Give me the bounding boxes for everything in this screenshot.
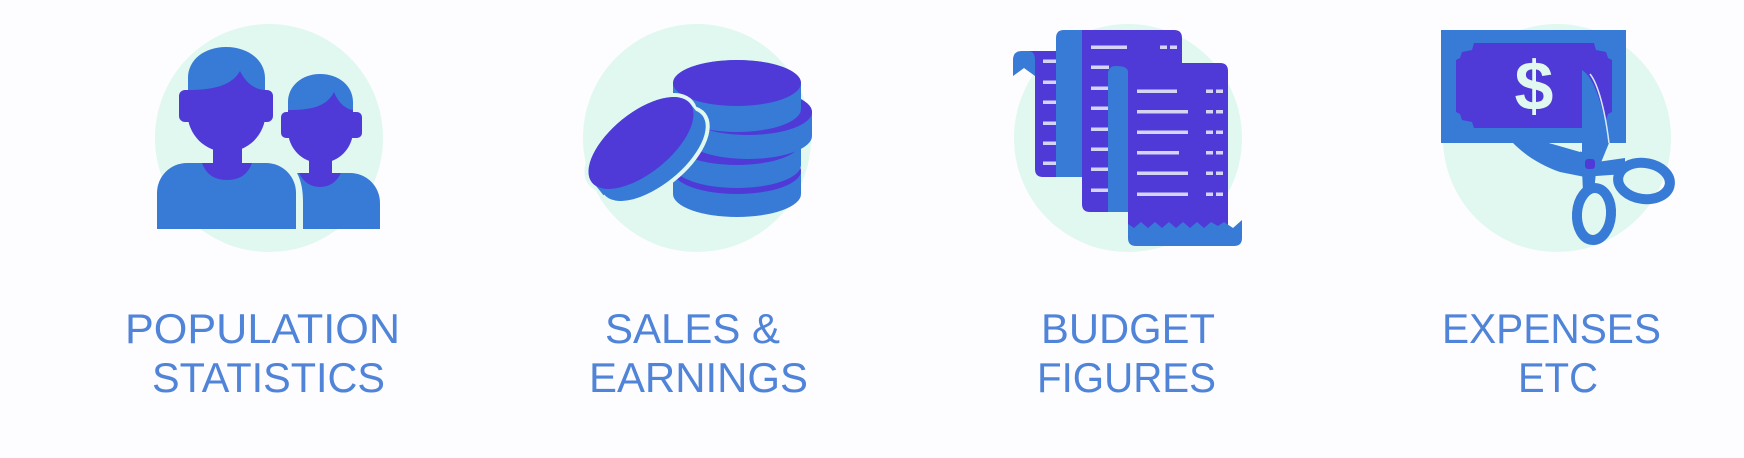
- label: budget figures: BUDGET: [1041, 305, 1215, 352]
- panel: budget figures: [1013, 24, 1242, 401]
- icon: scissors cutting banknote: [1441, 24, 1672, 252]
- label: budget figures: [1037, 305, 1216, 401]
- label: sales and earnings: [589, 305, 808, 401]
- icon: receipts: [1013, 24, 1242, 252]
- label: expenses etc: ETC: [1518, 354, 1598, 401]
- icon: two people: [155, 24, 383, 252]
- label: expenses etc: [1442, 305, 1661, 401]
- label: expenses etc: EXPENSES: [1442, 305, 1661, 352]
- label: sales and earnings: EARNINGS: [589, 354, 808, 401]
- label: population statistics: [125, 305, 400, 401]
- icon: coin stack: [573, 24, 812, 252]
- label: population statistics: POPULATION: [125, 305, 400, 352]
- label: population statistics: STATISTICS: [152, 354, 385, 401]
- icon: scissors cutting banknote: $: [1515, 47, 1553, 125]
- label: sales and earnings: SALES &: [605, 305, 780, 352]
- label: budget figures: FIGURES: [1037, 354, 1216, 401]
- panel: population statistics: [125, 24, 400, 401]
- panel: sales and earnings: [573, 24, 812, 401]
- panel: expenses: [1441, 24, 1672, 401]
